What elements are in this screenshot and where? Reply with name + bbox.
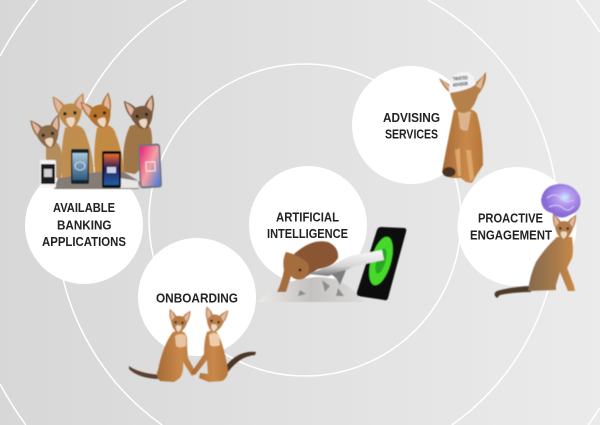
label: artificial intelligence <box>267 210 348 241</box>
panel: available banking applications <box>25 166 143 284</box>
left cat <box>157 309 196 382</box>
phone <box>357 227 406 300</box>
cat 4 <box>123 95 159 174</box>
phone 3 <box>102 151 121 188</box>
cat <box>277 241 338 292</box>
label: proactive engagement: PROACTIVE <box>478 212 543 226</box>
cap with text: TRUSTED <box>453 75 468 83</box>
right cat <box>191 306 228 382</box>
label: advising services: ADVISING <box>383 111 440 125</box>
cat 1 <box>30 114 65 178</box>
phone 1 <box>40 160 56 188</box>
cat paws <box>442 167 456 177</box>
label: onboarding: ONBOARDING <box>156 292 238 306</box>
panel: proactive engagement <box>458 167 576 286</box>
brain <box>541 184 581 218</box>
rock <box>258 277 363 302</box>
label: proactive engagement: ENGAGEMENT <box>470 228 552 242</box>
cat body <box>442 109 483 183</box>
label: proactive engagement <box>470 212 552 242</box>
illustration: cat with glowing brain <box>494 184 581 298</box>
panel: advising services <box>352 66 470 184</box>
tail <box>494 286 531 298</box>
body <box>528 237 575 291</box>
label: artificial intelligence: ARTIFICIAL <box>276 210 339 224</box>
cat tails <box>129 366 160 379</box>
cat 2 <box>53 93 94 178</box>
robot arm <box>308 250 384 285</box>
panel: onboarding <box>138 238 256 356</box>
illustration: cat with robot arm and phone <box>258 227 406 302</box>
cap with text: ADVISOR <box>453 81 468 89</box>
label: available banking applications: BANKING <box>57 218 112 232</box>
phone 2 <box>71 149 89 184</box>
label: advising services: SERVICES <box>385 128 438 142</box>
label: available banking applications <box>42 201 126 249</box>
illustration: cat with trusted advisor cap <box>439 72 486 183</box>
panel: artificial intelligence <box>249 166 367 284</box>
rock base <box>54 172 140 189</box>
label: advising services <box>383 111 440 142</box>
cap with text <box>449 72 476 93</box>
illustration: four cats with phones <box>30 92 162 189</box>
illustration: two cats holding paws <box>129 306 256 382</box>
head <box>552 214 576 240</box>
label: available banking applications: APPLICATIONS <box>42 235 126 249</box>
cat head <box>439 72 486 113</box>
label: available banking applications: AVAILABLE <box>53 201 115 215</box>
cat 3 <box>80 92 124 172</box>
phone 4 <box>138 143 162 189</box>
label: artificial intelligence: INTELLIGENCE <box>267 227 348 241</box>
